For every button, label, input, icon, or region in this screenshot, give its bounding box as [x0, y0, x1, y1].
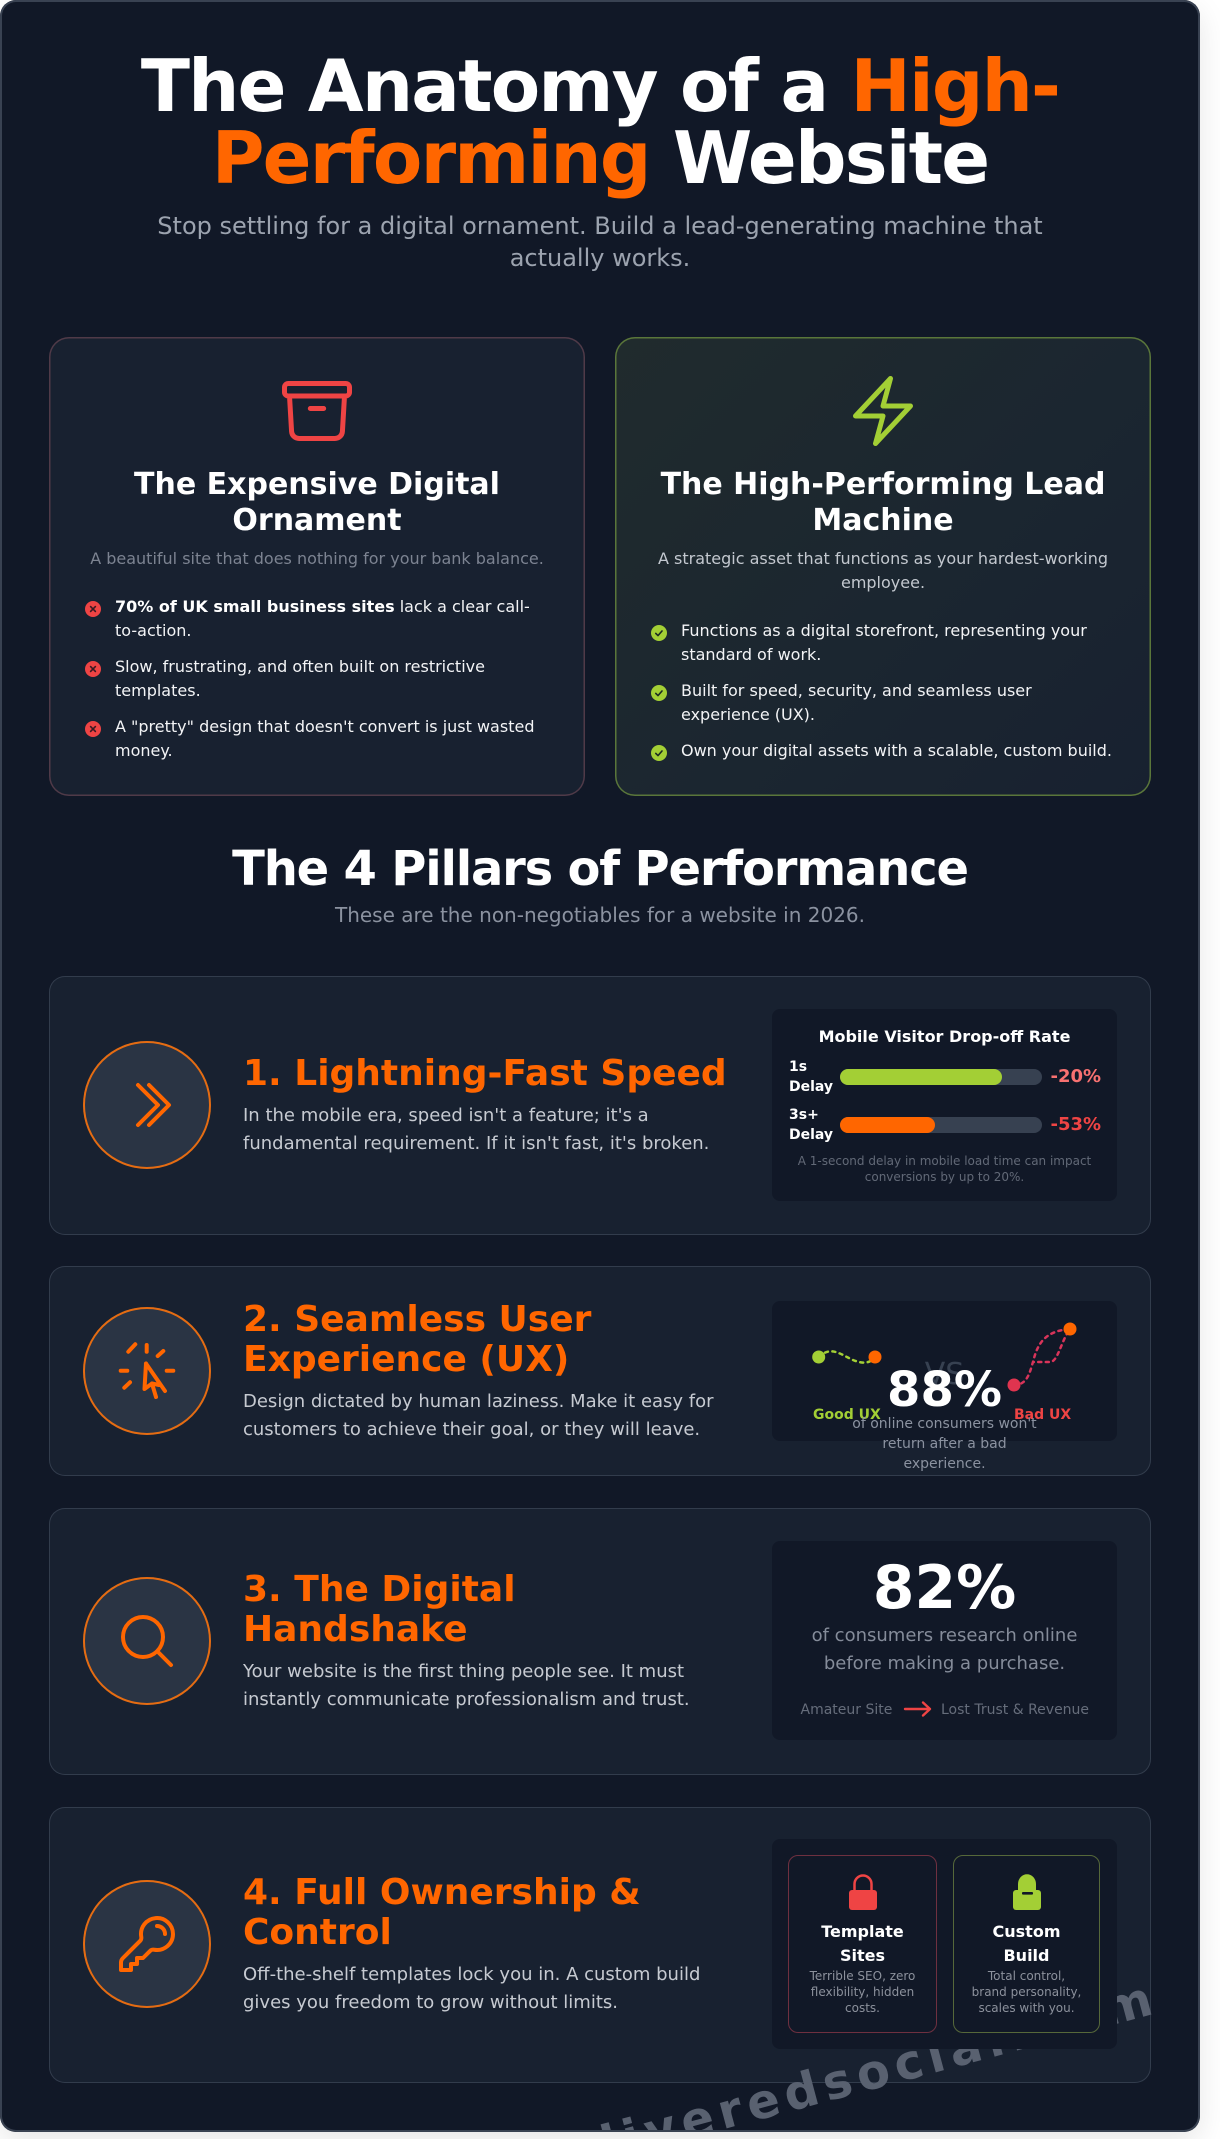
option name	[821, 1922, 904, 1964]
pillar title: Control	[243, 1912, 392, 1953]
value: -20%: -20%	[1050, 1066, 1101, 1086]
icon: double chevron	[83, 1041, 211, 1169]
chart title: Mobile Visitor Drop-off Rate	[819, 1026, 1070, 1046]
chart note: conversions by up to 20%.	[865, 1170, 1024, 1184]
icon: archive box	[282, 381, 352, 441]
panel: pillar 1 speed	[49, 976, 1151, 1234]
subtitle: actually works.	[510, 244, 690, 272]
bullet: call to action: to-action.	[115, 621, 191, 640]
pillar text: fundamental requirement. If it isn't fast, it's broken.	[243, 1132, 709, 1154]
bullet: slow templates	[85, 657, 485, 700]
stat: 88%: 88%	[887, 1362, 1002, 1418]
pillar text: gives you freedom to grow without limits.	[243, 1992, 618, 2013]
panel: pillar 3 digital handshake	[49, 1508, 1151, 1774]
pillar text: customers to achieve their goal, or they will leave.	[243, 1418, 700, 1440]
subtitle: Stop settling for a digital ornament. Build a lead-generating machine that	[157, 212, 1043, 240]
pillar text: Off-the-shelf templates lock you in. A custom build	[243, 1964, 700, 1985]
option: custom build	[953, 1855, 1100, 2033]
title	[141, 44, 1059, 200]
bullet: wasted money: money.	[115, 741, 173, 760]
stat caption	[852, 1416, 1037, 1472]
option name: Build	[1003, 1946, 1050, 1964]
stat caption: before making a purchase.	[824, 1652, 1065, 1674]
icon: cursor click	[83, 1307, 211, 1435]
panel: pillar 2 UX	[49, 1266, 1151, 1476]
pillar text	[243, 1661, 690, 1710]
label: good UX: Good UX	[813, 1407, 881, 1423]
option name	[993, 1922, 1060, 1964]
heading: Ornament	[232, 503, 402, 538]
option text: costs.	[845, 2001, 880, 2015]
value: -53%: -53%	[1050, 1114, 1101, 1134]
pillar text	[243, 1104, 709, 1154]
option name: Custom	[993, 1922, 1060, 1940]
bullet: call to action: 70% of UK small business sites lack a clear call-	[115, 597, 530, 616]
stat caption: return after a bad	[882, 1436, 1007, 1452]
subtitle	[157, 212, 1043, 272]
option text: Terrible SEO, zero	[810, 1969, 915, 1983]
icon: lightning bolt	[853, 376, 913, 446]
description: employee.	[841, 573, 925, 592]
icon: open lock	[849, 1874, 877, 1910]
panel: expensive digital ornament	[49, 337, 585, 796]
heading: Machine	[812, 503, 954, 538]
option text	[810, 1969, 915, 2015]
chart note	[798, 1154, 1091, 1184]
pillar text: instantly communicate professionalism and trust.	[243, 1689, 690, 1710]
comparison panel	[772, 1839, 1117, 2049]
panel: high-performing lead machine	[615, 337, 1151, 796]
bullet: slow templates: templates.	[115, 681, 201, 700]
option name: Template	[821, 1922, 904, 1940]
arrow	[904, 1701, 932, 1717]
bullet: digital storefront: Functions as a digital storefront, representing your	[681, 621, 1087, 640]
section heading: The 4 Pillars of Performance	[232, 841, 968, 897]
pillar title: 3. The Digital	[243, 1569, 516, 1610]
pillar text	[243, 1964, 700, 2013]
bullet: wasted money: A "pretty" design that doesn't convert is just wasted	[115, 717, 534, 736]
chart: mobile visitor drop-off	[772, 1009, 1117, 1201]
stat caption: of online consumers won't	[852, 1416, 1037, 1432]
chart note: A 1-second delay in mobile load time can impact	[798, 1154, 1091, 1168]
label: 1s delay	[789, 1059, 833, 1095]
stat panel: 82%	[772, 1541, 1117, 1740]
title: Performing Website	[212, 116, 988, 200]
option text: brand personality,	[972, 1985, 1081, 1999]
icon: magnifying glass	[83, 1577, 211, 1705]
description: A beautiful site that does nothing for your bank balance.	[90, 549, 544, 568]
bullet: speed and security	[651, 681, 1032, 724]
bullet: speed and security: Built for speed, security, and seamless user	[681, 681, 1032, 700]
pillar title: Experience (UX)	[243, 1338, 569, 1380]
label: 3s+ delay: Delay	[789, 1127, 833, 1143]
heading	[134, 467, 500, 538]
bar: 3s+	[840, 1117, 1042, 1133]
bullet: wasted money	[85, 717, 534, 760]
description	[658, 549, 1108, 592]
label: 3s+ delay: 3s+	[789, 1107, 819, 1123]
bullet: slow templates: Slow, frustrating, and often built on restrictive	[115, 657, 485, 676]
option name: Sites	[840, 1946, 885, 1964]
pillar title: 4. Full Ownership &	[243, 1872, 641, 1913]
icon: key	[83, 1880, 211, 2008]
option text: flexibility, hidden	[811, 1985, 914, 1999]
panel: pillar 4 ownership	[49, 1806, 1151, 2082]
pillar title	[243, 1872, 641, 1953]
pillar text	[243, 1390, 714, 1440]
label: amateur site: Amateur Site	[800, 1702, 892, 1718]
bar: 1s	[840, 1069, 1042, 1085]
description: A strategic asset that functions as your hardest-working	[658, 549, 1108, 568]
pillar title: 1. Lightning-Fast Speed	[243, 1053, 727, 1094]
bullet: digital storefront: standard of work.	[681, 645, 821, 664]
option text: scales with you.	[978, 2001, 1075, 2015]
section subtitle: These are the non-negotiables for a website in 2026.	[335, 902, 865, 926]
pillar text: Design dictated by human laziness. Make it easy for	[243, 1390, 714, 1412]
label: bad UX: Bad UX	[1014, 1407, 1071, 1423]
bullet: digital storefront	[651, 621, 1087, 664]
stat caption: experience.	[903, 1456, 986, 1472]
label: 3s+ delay	[789, 1107, 833, 1143]
option: template sites	[788, 1855, 937, 2033]
heading: The Expensive Digital	[134, 467, 500, 502]
user journey paths	[812, 1322, 1076, 1392]
option text: Total control,	[988, 1969, 1065, 1983]
pillar title	[243, 1298, 592, 1380]
heading: The High-Performing Lead	[661, 467, 1105, 502]
pillar text: Your website is the first thing people see. It must	[243, 1661, 684, 1682]
stat caption	[812, 1624, 1077, 1674]
bullet: call to action	[85, 597, 530, 640]
bullet: speed and security: experience (UX).	[681, 705, 815, 724]
option text	[972, 1969, 1081, 2015]
label: VS: VS	[925, 1357, 964, 1392]
heading	[660, 467, 1105, 538]
pillar text: In the mobile era, speed isn't a feature; it's a	[243, 1104, 649, 1126]
icon: closed lock	[1013, 1874, 1041, 1910]
pillar title	[243, 1569, 516, 1650]
pillar title: Handshake	[243, 1609, 468, 1650]
diagram: good vs bad UX	[772, 1301, 1117, 1441]
stat caption: of consumers research online	[812, 1624, 1077, 1646]
label: 1s delay: 1s	[789, 1059, 807, 1075]
stat: 82%: 82%	[873, 1553, 1016, 1623]
title: The Anatomy of a High-	[141, 44, 1059, 128]
bullet: own your assets: Own your digital assets with a scalable, custom build.	[681, 741, 1112, 760]
pillar title: 2. Seamless User	[243, 1298, 591, 1340]
label: 1s delay: Delay	[789, 1079, 833, 1095]
label: lost trust: Lost Trust & Revenue	[941, 1702, 1089, 1718]
